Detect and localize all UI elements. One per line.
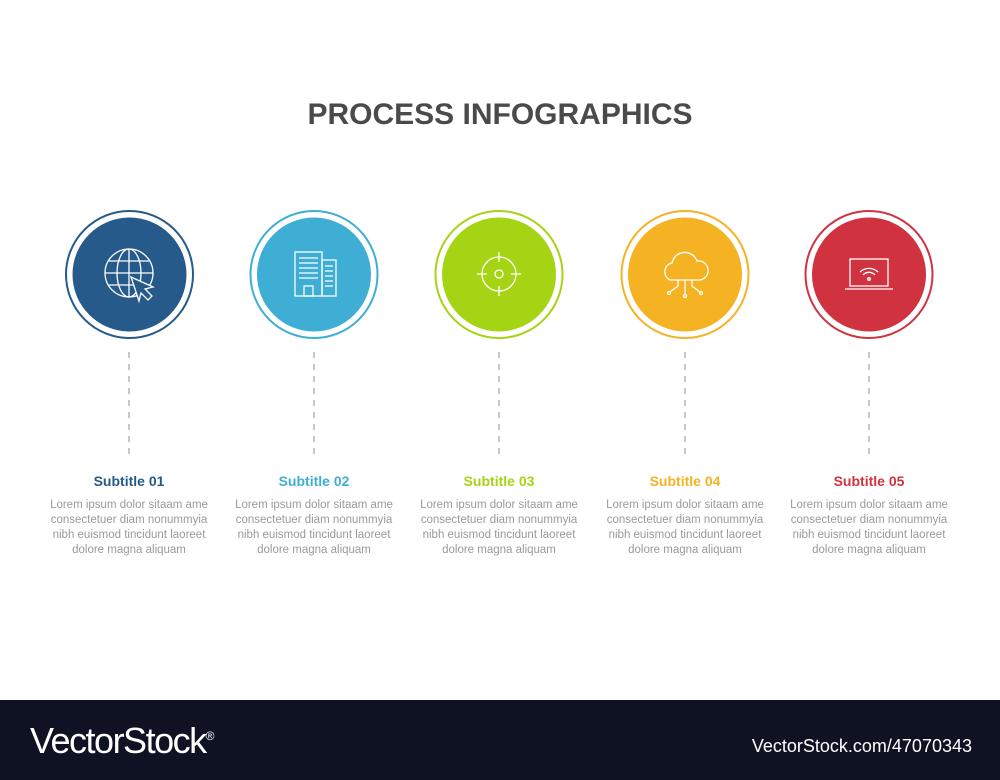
footer bar [0, 700, 1000, 780]
text block 3: Lorem ipsum dolor sitaam ame consectetuer diam nonummyia nibh euismod tincidunt laoreet dolore magna aliquam [420, 499, 578, 556]
text block 4: Subtitle 04 [650, 473, 720, 489]
text block 1: Lorem ipsum dolor sitaam ame consectetuer diam nonummyia nibh euismod tincidunt laoreet dolore magna aliquam [50, 499, 208, 556]
step 2 circle: buildings [250, 211, 378, 338]
text block 5 [790, 473, 948, 556]
title: PROCESS INFOGRAPHICS [307, 98, 693, 131]
text block 3 [420, 473, 578, 556]
text block 4 [606, 473, 764, 556]
footer bar: VectorStock® [30, 720, 213, 761]
text block 2: Subtitle 02 [279, 473, 349, 489]
text block 2: Lorem ipsum dolor sitaam ame consectetuer diam nonummyia nibh euismod tincidunt laoreet dolore magna aliquam [235, 499, 393, 556]
footer bar: VectorStock.com/47070343 [752, 736, 972, 756]
step 3 circle: target [436, 211, 562, 338]
step 5 circle: laptop [806, 211, 932, 338]
text block 5: Subtitle 05 [834, 473, 904, 489]
text block 5: Lorem ipsum dolor sitaam ame consectetuer diam nonummyia nibh euismod tincidunt laoreet dolore magna aliquam [790, 499, 948, 556]
step 4 circle: cloud [622, 211, 748, 338]
text block 3: Subtitle 03 [464, 473, 534, 489]
circles and connectors [65, 210, 934, 454]
text block 4: Lorem ipsum dolor sitaam ame consectetuer diam nonummyia nibh euismod tincidunt laoreet dolore magna aliquam [606, 499, 764, 556]
text block 1: Subtitle 01 [94, 473, 164, 489]
step 1 circle: globe [66, 211, 193, 338]
text block 2 [235, 473, 393, 556]
text block 1 [50, 473, 208, 556]
